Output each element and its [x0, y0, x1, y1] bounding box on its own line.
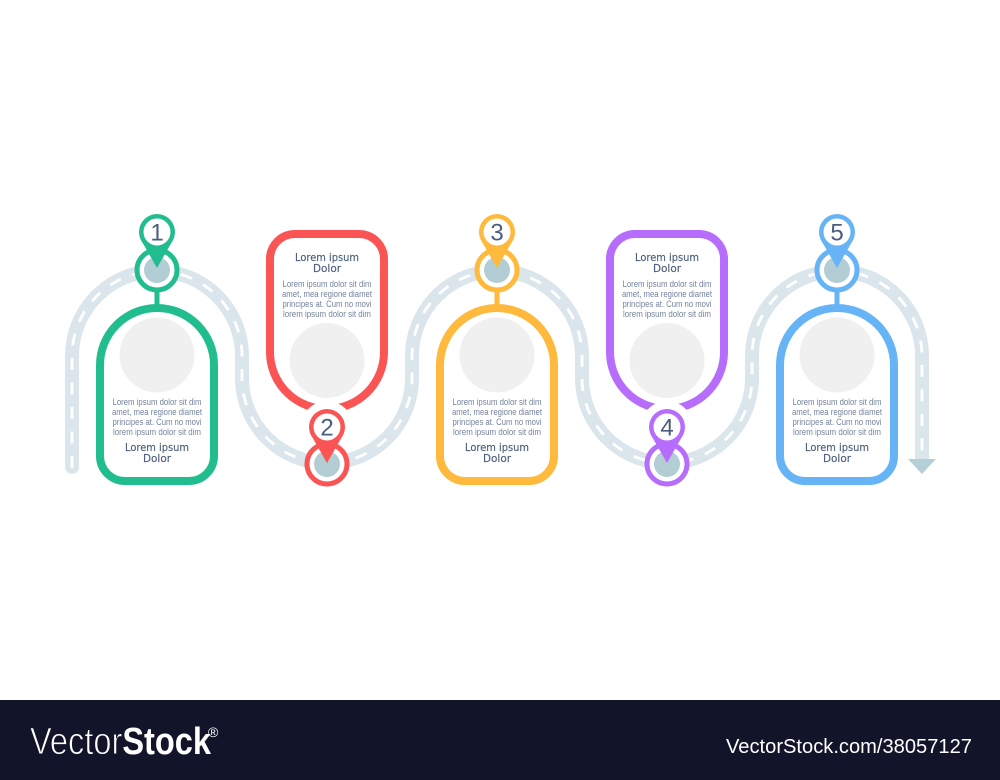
gap around pin 4 [641, 401, 693, 453]
footer bar [0, 700, 1000, 780]
body text 2: principes at. Cum no movi [282, 299, 372, 309]
body text 4: Lorem ipsum dolor sit dim [622, 279, 712, 289]
heading 1: Lorem ipsum [125, 442, 189, 454]
marker ring 2 [307, 444, 347, 484]
connector 5 [834, 288, 840, 306]
body text 1: principes at. Cum no movi [112, 417, 202, 427]
card 2 outline [270, 234, 384, 409]
location pin 2: 2 [320, 414, 334, 442]
body text 5: lorem ipsum dolor sit dim [793, 427, 881, 437]
body text 3: Lorem ipsum dolor sit dim [452, 397, 542, 407]
road end arrow [908, 459, 936, 474]
heading 2: Dolor [313, 263, 342, 275]
image placeholder 2 [290, 323, 364, 398]
body text 1: Lorem ipsum dolor sit dim [112, 397, 202, 407]
location pin 1: 1 [150, 220, 164, 246]
body text 2: Lorem ipsum dolor sit dim [282, 279, 372, 289]
image placeholder 3 [460, 318, 534, 392]
location pin 1 [139, 214, 175, 268]
body text 2: lorem ipsum dolor sit dim [283, 309, 371, 319]
step 4 panel [610, 234, 724, 484]
body text 2: amet, mea regione diamet [282, 289, 372, 299]
marker ring 1 [137, 250, 177, 290]
location pin 4 [649, 409, 685, 463]
connector 1 [154, 288, 160, 306]
body text 5: Lorem ipsum dolor sit dim [792, 397, 882, 407]
heading 1: Dolor [143, 453, 172, 465]
marker ring 4 [647, 444, 687, 484]
location pin 3 [479, 214, 515, 268]
heading 4: Dolor [653, 263, 682, 275]
card 3 outline [440, 308, 554, 481]
heading 4: Lorem ipsum [635, 252, 699, 264]
step 3 panel [440, 214, 554, 481]
step 1 panel [100, 214, 214, 481]
heading 3: Dolor [483, 453, 512, 465]
card 1 outline [100, 308, 214, 481]
image placeholder 1 [120, 318, 194, 392]
image placeholder 5 [800, 318, 874, 392]
card 5 outline [780, 308, 894, 481]
location pin 5 [819, 214, 855, 268]
location pin 4: 4 [660, 414, 674, 442]
heading 3: Lorem ipsum [465, 442, 529, 454]
card 4 outline [610, 234, 724, 409]
footer logo: VectorStock [30, 721, 212, 763]
body text 5: principes at. Cum no movi [792, 417, 882, 427]
marker ring 5 [817, 250, 857, 290]
body text 4: amet, mea regione diamet [622, 289, 712, 299]
winding road [72, 271, 922, 468]
body text 4: lorem ipsum dolor sit dim [623, 309, 711, 319]
heading 5: Lorem ipsum [805, 442, 869, 454]
location pin 2 [309, 409, 345, 463]
body text 5: amet, mea regione diamet [792, 407, 882, 417]
marker ring 3 [477, 250, 517, 290]
body text 4: principes at. Cum no movi [622, 299, 712, 309]
heading 5: Dolor [823, 453, 852, 465]
registered mark: ® [208, 724, 219, 740]
body text 3: lorem ipsum dolor sit dim [453, 427, 541, 437]
image placeholder 4 [630, 323, 704, 398]
step 2 panel [270, 234, 384, 484]
footer image id: VectorStock.com/38057127 [726, 736, 972, 758]
body text 1: amet, mea regione diamet [112, 407, 202, 417]
connector 3 [494, 288, 500, 306]
body text 1: lorem ipsum dolor sit dim [113, 427, 201, 437]
body text 3: amet, mea regione diamet [452, 407, 542, 417]
location pin 3: 3 [490, 220, 504, 246]
body text 3: principes at. Cum no movi [452, 417, 542, 427]
step 5 panel [780, 214, 894, 481]
location pin 5: 5 [830, 220, 844, 246]
gap around pin 2 [301, 401, 353, 453]
heading 2: Lorem ipsum [295, 252, 359, 264]
